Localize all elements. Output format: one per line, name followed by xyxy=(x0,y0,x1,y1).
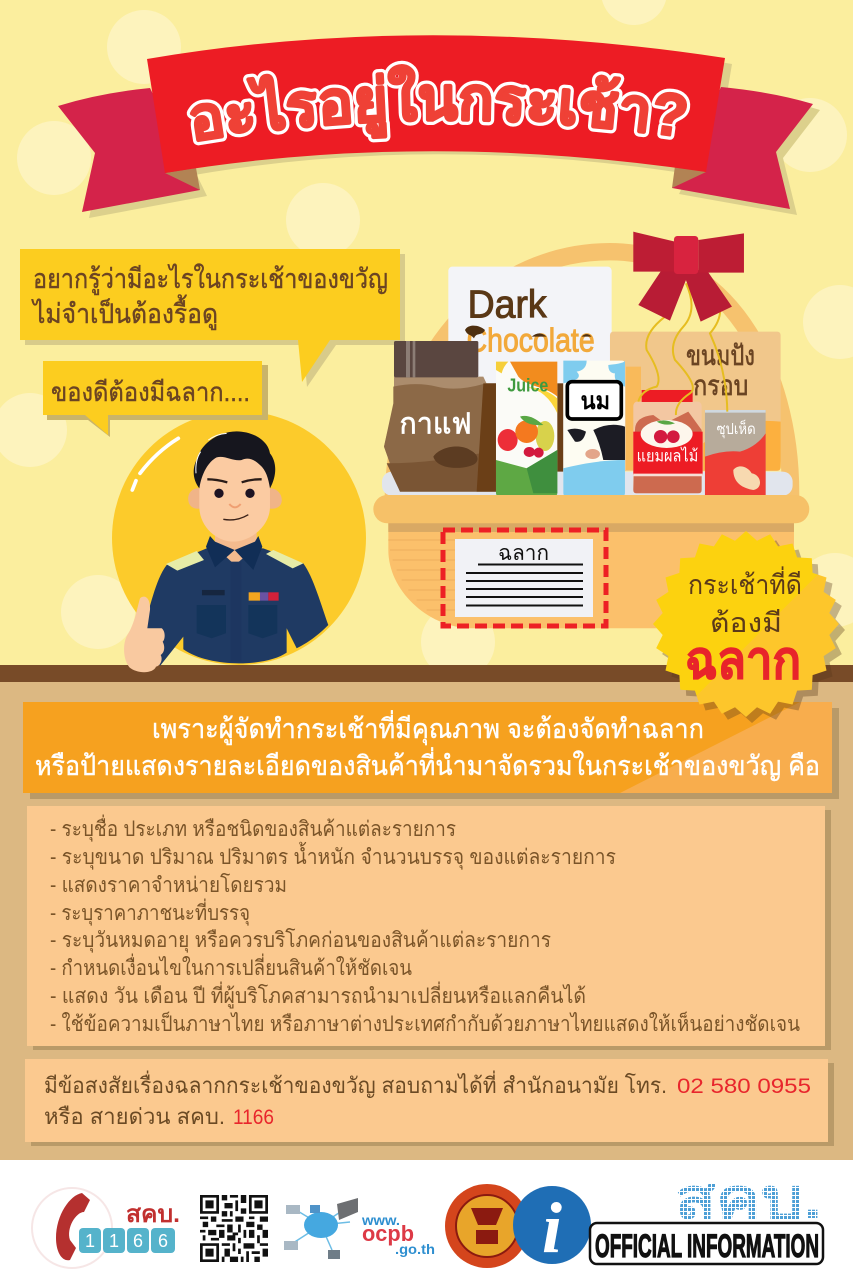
logo: ocpb website: ocpb xyxy=(362,1221,414,1246)
logo: official information xyxy=(590,1167,823,1264)
milk carton xyxy=(563,361,625,496)
QR code xyxy=(200,1195,268,1262)
dark chocolate box xyxy=(448,267,612,492)
logo: consumer protection board seal xyxy=(445,1184,529,1268)
nose xyxy=(229,504,241,507)
logo: hotline 1166: สคบ. xyxy=(126,1201,180,1228)
bread package: กรอบ xyxy=(693,370,748,401)
pockets xyxy=(197,605,277,638)
logo: ocpb website xyxy=(284,1198,435,1259)
logo: ocpb website: .go.th xyxy=(395,1241,435,1257)
ribbon folds xyxy=(165,166,706,190)
label on basket with dashed frame xyxy=(443,530,606,626)
starburst badge: ฉลาก xyxy=(685,632,801,690)
yellow circle xyxy=(112,411,366,665)
speech bubble: good things need a label: ของดีต้องมีฉลาก.... xyxy=(51,377,250,407)
epaulettes xyxy=(166,550,303,571)
basket weave xyxy=(388,540,530,610)
speech bubble: intro question: ไม่จำเป็นต้องรื้อดู xyxy=(31,294,218,330)
logo: information i: i xyxy=(542,1188,562,1268)
panel: label requirements list: - กำหนดเงื่อนไขในการเปลี่ยนสินค้าให้ชัดเจน xyxy=(50,953,412,980)
mushroom soup can xyxy=(705,410,766,496)
officer character in yellow circle xyxy=(112,411,366,672)
panel: contact information: มีข้อสงสัยเรื่องฉลากกระเช้าของขวัญ สอบถามได้ที่ สำนักอนามัย โทร. xyxy=(44,1070,667,1098)
panel: contact information: หรือ สายด่วน สคบ. xyxy=(44,1104,225,1129)
milk carton: นม xyxy=(581,388,610,415)
red bow xyxy=(633,232,744,322)
thumbs-up hand xyxy=(124,597,165,672)
logo: hotline 1166: 1 xyxy=(85,1231,95,1251)
starburst badge xyxy=(653,531,845,723)
ears xyxy=(188,488,282,509)
panel: label requirements list: - ระบุชื่อ ประเภท หรือชนิดของสินค้าแต่ละรายการ xyxy=(50,814,456,842)
mushroom soup can: ซุปเห็ด xyxy=(717,419,756,439)
logo: hotline 1166: 6 xyxy=(158,1231,168,1251)
panel: label requirements list: - แสดง วัน เดือน ปี ที่ผู้บริโภคสามารถนำมาเปลี่ยนหรือแลกคืนได้ xyxy=(50,981,586,1009)
starburst badge: ต้องมี xyxy=(710,608,782,638)
speech bubble: intro question xyxy=(20,249,405,387)
coffee jar: กาแฟ xyxy=(399,407,472,440)
logo: hotline 1166: 1 xyxy=(109,1231,119,1251)
network icon xyxy=(284,1198,358,1259)
logo: hotline 1166 xyxy=(32,1188,180,1268)
hair highlight xyxy=(196,433,227,473)
panel: contact information: 1166 xyxy=(233,1106,274,1129)
jam jar: แยมผลไม้ xyxy=(637,447,698,466)
panel: label requirements list: - ระบุวันหมดอายุ หรือควรบริโภคก่อนของสินค้าแต่ละรายการ xyxy=(50,928,551,953)
eyes xyxy=(214,489,255,498)
circle glare xyxy=(132,438,178,490)
medal ribbons xyxy=(249,592,260,601)
face xyxy=(199,453,270,542)
mouth xyxy=(223,515,248,520)
placket xyxy=(231,562,241,662)
logo: hotline 1166: 6 xyxy=(133,1231,143,1251)
speech bubble: good things need a label xyxy=(43,361,268,437)
panel: contact information: 02 580 0955 xyxy=(677,1075,811,1098)
bread package: ขนมปัง xyxy=(686,340,755,371)
left ribbon tail xyxy=(58,88,200,212)
orange heading band xyxy=(23,702,839,799)
starburst badge: กระเช้าที่ดี xyxy=(688,566,802,600)
panel: label requirements list xyxy=(27,806,831,1050)
panel: contact information xyxy=(25,1059,834,1146)
logo: ocpb website: www. xyxy=(361,1212,400,1228)
panel: label requirements list: - ระบุขนาด ปริมาณ ปริมาตร น้ำหนัก จำนวนบรรจุ ของแต่ละรายการ xyxy=(50,842,616,870)
neck xyxy=(215,523,257,565)
hair xyxy=(194,431,275,488)
panel: label requirements list: - แสดงราคาจำหน่ายโดยรวม xyxy=(50,873,287,897)
dark chocolate box: Dark xyxy=(468,282,547,326)
name tag xyxy=(202,590,225,595)
uniform body xyxy=(143,548,328,666)
juice carton xyxy=(496,362,557,496)
logo: official information: สคบ. xyxy=(675,1167,822,1230)
title ribbon banner xyxy=(58,35,820,218)
basket handle xyxy=(393,252,791,497)
gold ribbons xyxy=(638,283,727,415)
orange heading band: เพราะผู้จัดทำกระเช้าที่มีคุณภาพ จะต้องจัดทำฉลาก xyxy=(152,710,704,746)
title text: อะไรอยู่ในกระเช้า? xyxy=(190,64,687,142)
juice carton: Juice xyxy=(507,375,548,396)
brows xyxy=(207,479,262,482)
dark chocolate box: Chocolate xyxy=(467,323,595,360)
title text: อะไรอยู่ในกระเช้า? xyxy=(186,60,690,146)
jam jar xyxy=(633,390,703,493)
bread package xyxy=(610,332,781,471)
speech bubble: intro question: อยากรู้ว่ามีอะไรในกระเช้าของขวัญ xyxy=(33,263,388,295)
gift basket illustration xyxy=(373,232,809,628)
basket body xyxy=(388,517,794,628)
rim shadow xyxy=(388,520,794,532)
right ribbon tail xyxy=(672,87,813,209)
shelf xyxy=(382,472,793,496)
coffee jar xyxy=(384,341,496,492)
ribbon main band xyxy=(147,35,725,173)
basket rim xyxy=(373,495,809,523)
label on basket with dashed frame: ฉลาก xyxy=(498,542,549,565)
collar xyxy=(206,536,262,570)
logo: information i xyxy=(513,1186,591,1268)
panel: label requirements list: - ระบุราคาภาชนะที่บรรจุ xyxy=(50,898,250,926)
